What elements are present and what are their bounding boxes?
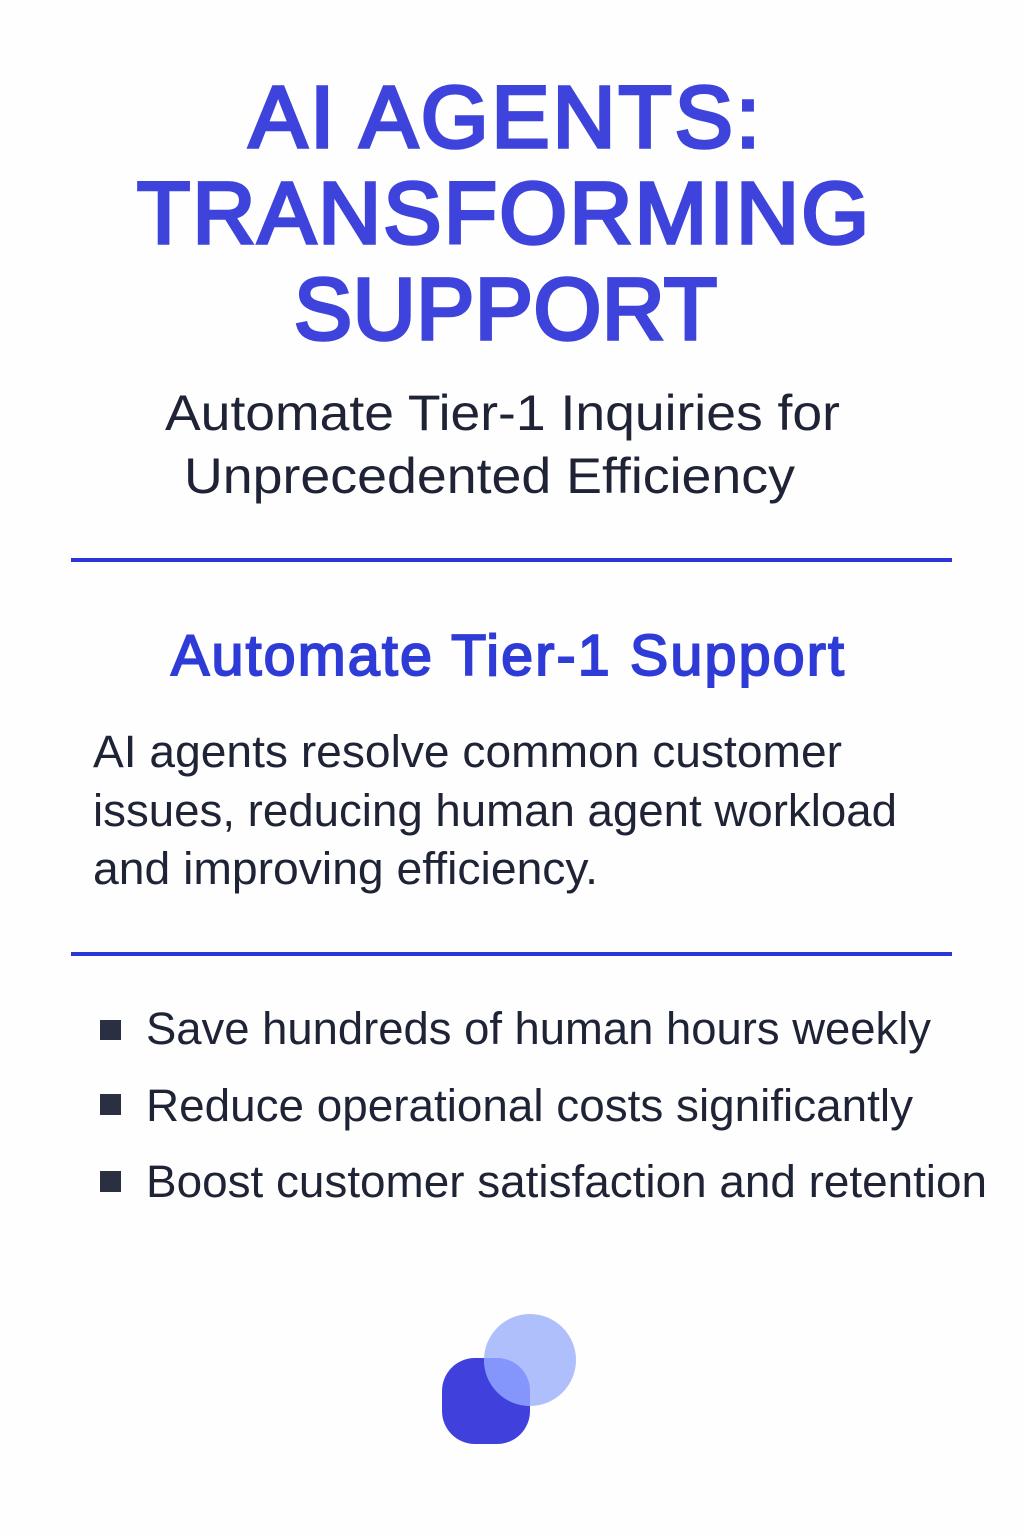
benefits list [100,1003,987,1207]
title [137,69,869,358]
section heading: Automate Tier-1 Support [171,624,844,688]
body paragraph: and improving efficiency. [93,843,598,894]
bullet: boost satisfaction: Boost customer satisfaction and retention [146,1156,987,1207]
subtitle: Automate Tier-1 Inquiries for [165,385,840,441]
title: SUPPORT [294,261,717,358]
body paragraph: AI agents resolve common customer [93,726,842,777]
body paragraph: issues, reducing human agent workload [93,785,897,836]
title: TRANSFORMING [137,165,869,262]
bullet: reduce costs: Reduce operational costs significantly [146,1080,914,1131]
title: AI AGENTS: [249,69,760,166]
body paragraph [93,726,897,894]
icon: overlapping square and circle logo [442,1314,576,1444]
bullet: save hours: Save hundreds of human hours weekly [146,1003,931,1054]
subtitle [165,385,840,504]
subtitle: Unprecedented Efficiency [184,448,795,504]
